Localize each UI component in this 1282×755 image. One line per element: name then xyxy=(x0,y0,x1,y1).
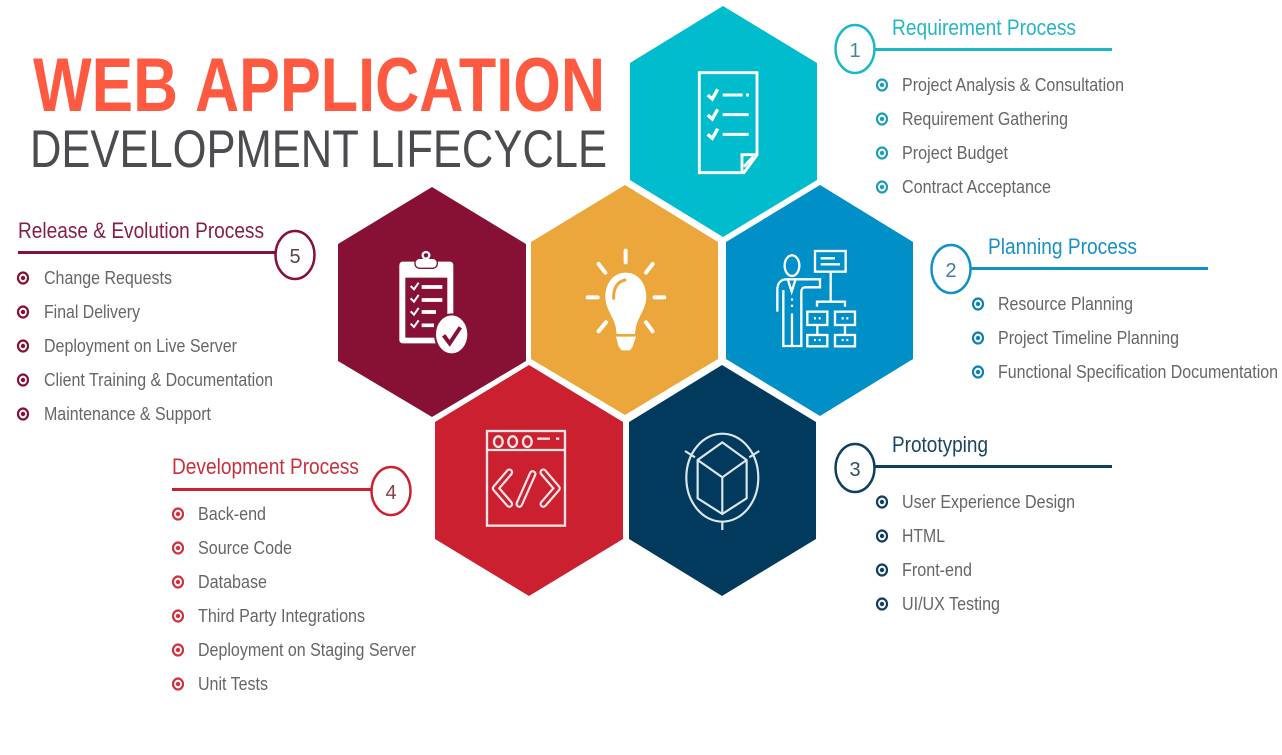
panel: planning process xyxy=(932,234,1278,382)
rule xyxy=(971,267,1208,270)
bullet list: Project Timeline Planning xyxy=(998,327,1179,348)
hexagon: prototyping xyxy=(629,365,816,596)
icon: light bulb xyxy=(588,251,664,350)
bullet list xyxy=(877,491,1075,614)
heading: Release & Evolution Process xyxy=(18,218,264,243)
panel: release and evolution process xyxy=(18,218,314,424)
bullet list: Final Delivery xyxy=(44,301,141,322)
number badge xyxy=(372,467,410,515)
hexagon: central idea xyxy=(531,185,718,415)
icon: clipboard with check xyxy=(399,252,468,354)
bullet list: Requirement Gathering xyxy=(902,108,1068,129)
title line 1: WEB xyxy=(33,43,178,128)
panel: prototyping xyxy=(836,432,1112,614)
bullet list: UI/UX Testing xyxy=(902,593,1000,614)
rule xyxy=(18,251,275,254)
icon: checklist document xyxy=(699,73,757,173)
bullet list: Front-end xyxy=(902,559,972,580)
rule xyxy=(875,48,1112,51)
bullet list: User Experience Design xyxy=(902,491,1075,512)
title line 1: APPLICATION xyxy=(195,43,605,128)
number badge: 2 xyxy=(945,260,957,282)
bullet list xyxy=(973,293,1278,382)
number badge: 4 xyxy=(385,482,397,504)
bullet list: Database xyxy=(198,571,267,592)
number badge xyxy=(836,444,874,492)
hexagon: requirement xyxy=(630,6,817,237)
bullet list: Resource Planning xyxy=(998,293,1133,314)
number badge xyxy=(836,25,874,73)
bullet list: Deployment on Live Server xyxy=(44,335,237,356)
bullet list: Contract Acceptance xyxy=(902,176,1051,197)
heading: Requirement Process xyxy=(892,15,1076,40)
number badge: 5 xyxy=(289,246,301,268)
bullet list: Deployment on Staging Server xyxy=(198,639,416,660)
heading: Planning Process xyxy=(988,234,1137,259)
icon: 3D cube xyxy=(685,434,759,530)
panel: requirement process xyxy=(836,15,1124,197)
bullet list xyxy=(18,267,273,424)
panel: development process xyxy=(172,454,416,694)
hexagon: release and evolution xyxy=(338,187,526,417)
bullet list xyxy=(877,74,1124,197)
bullet list: Client Training & Documentation xyxy=(44,369,273,390)
number badge xyxy=(276,231,314,279)
icon: code window xyxy=(487,431,565,526)
bullet list: Maintenance & Support xyxy=(44,403,211,424)
heading: Development Process xyxy=(172,454,359,479)
bullet list: Unit Tests xyxy=(198,673,268,694)
hexagon: planning xyxy=(726,185,913,416)
title line 2: DEVELOPMENT LIFECYCLE xyxy=(30,120,607,179)
title line 1 xyxy=(33,43,605,128)
number badge xyxy=(932,245,970,293)
bullet list: Back-end xyxy=(198,503,266,524)
number badge: 1 xyxy=(849,40,861,62)
heading: Prototyping xyxy=(892,432,988,457)
hexagon: development xyxy=(435,365,623,596)
bullet list: Source Code xyxy=(198,537,292,558)
number badge: 3 xyxy=(849,459,861,481)
bullet list: Change Requests xyxy=(44,267,172,288)
bullet list: Project Budget xyxy=(902,142,1008,163)
rule xyxy=(172,488,371,491)
rule xyxy=(875,465,1112,468)
bullet list: Project Analysis & Consultation xyxy=(902,74,1124,95)
bullet list: Third Party Integrations xyxy=(198,605,365,626)
title xyxy=(30,43,607,179)
bullet list xyxy=(173,503,416,694)
icon: presenter with org chart xyxy=(777,251,855,346)
bullet list: HTML xyxy=(902,525,945,546)
